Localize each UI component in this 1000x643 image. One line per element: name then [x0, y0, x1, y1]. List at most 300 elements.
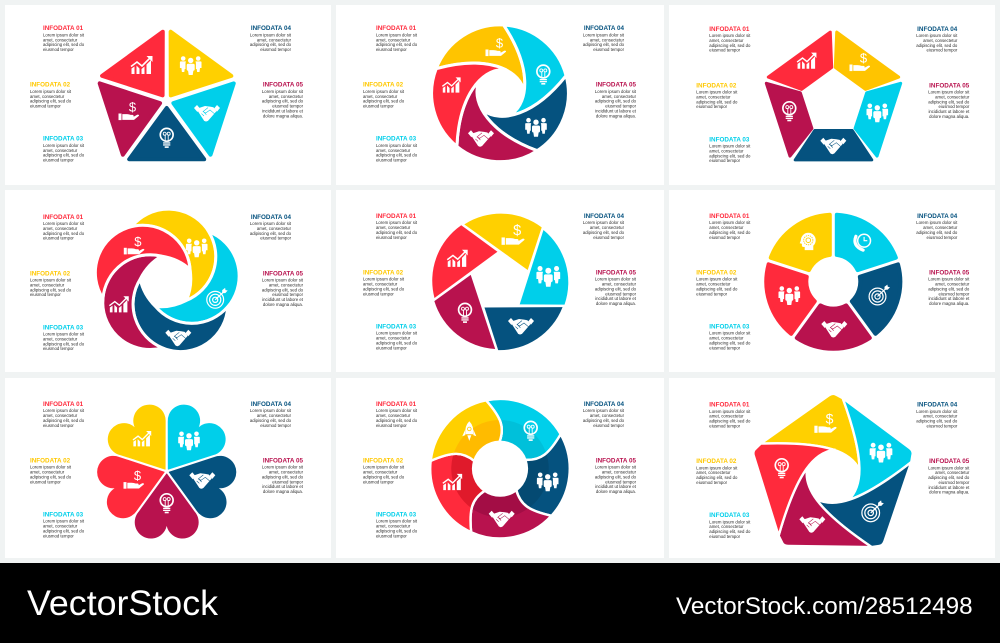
text: infodata 04: amet, consectetur [257, 413, 292, 418]
text: infodata 01: eiusmod tempor [709, 235, 741, 240]
icon: rocket [462, 421, 476, 441]
segment: cyan sector [818, 206, 902, 284]
icon: handshake [468, 130, 494, 147]
text: infodata 04: Lorem ipsum dolor sit [583, 408, 625, 413]
segment: red swirl [415, 49, 504, 153]
text: infodata 02: amet, consectetur [30, 283, 65, 288]
text: infodata 02: adipiscing elit, sed do [30, 474, 72, 479]
text: infodata 04: INFODATA 04 [917, 401, 958, 408]
text: infodata 04: Lorem ipsum dolor sit [916, 409, 958, 414]
text: infodata 04: amet, consectetur [257, 37, 292, 42]
panel: aperture circle [336, 190, 664, 372]
icon: clock and phone [855, 234, 870, 250]
text: infodata 01: Lorem ipsum dolor sit [709, 220, 751, 225]
text: infodata 02: adipiscing elit, sed do [696, 475, 738, 480]
text: infodata 05: adipiscing elit, sed do [595, 286, 637, 291]
icon: handshake [508, 318, 534, 334]
text: infodata 03: adipiscing elit, sed do [376, 153, 418, 158]
panel: swirl circle [336, 5, 664, 186]
text: infodata 01: eiusmod tempor [709, 48, 741, 53]
text blocks [363, 401, 637, 538]
text: infodata 03: INFODATA 03 [709, 323, 750, 330]
text: infodata 01: adipiscing elit, sed do [709, 43, 751, 48]
icon: chart [442, 77, 461, 93]
text: infodata 05: amet, consectetur [269, 283, 304, 288]
text: infodata 01: adipiscing elit, sed do [43, 231, 85, 236]
segment: crimson swirl [440, 82, 549, 186]
segment: cyan band [486, 399, 561, 460]
segment: crimson triangle [100, 67, 172, 155]
text: infodata 05: INFODATA 05 [929, 82, 970, 89]
text: infodata 04: amet, consectetur [257, 226, 292, 231]
text: infodata 05: eiusmod tempor [938, 104, 970, 109]
panel card [669, 378, 995, 558]
diagram: swirl donut [431, 400, 569, 538]
text: infodata 02: INFODATA 02 [696, 458, 737, 465]
segment: cyan blade [818, 383, 921, 500]
text: infodata 05: incididunt ut labore et [928, 296, 970, 301]
panel card [5, 190, 331, 372]
text blocks [30, 214, 304, 351]
segment: yellow triangle [140, 32, 231, 117]
icon: hand with dollar [118, 100, 139, 120]
text: infodata 05: incididunt ut labore et [928, 485, 970, 490]
text: infodata 03: Lorem ipsum dolor sit [709, 331, 751, 336]
segment: yellow trapezoid [819, 32, 899, 101]
text: infodata 05: Lorem ipsum dolor sit [262, 465, 304, 470]
diagram: crescent swirl [84, 209, 251, 370]
text: infodata 05: dolore magna aliqua. [263, 489, 303, 494]
text: infodata 04: INFODATA 04 [251, 214, 291, 221]
text: infodata 04: adipiscing elit, sed do [250, 42, 292, 47]
text: infodata 01: eiusmod tempor [43, 236, 74, 241]
text: infodata 03: Lorem ipsum dolor sit [376, 519, 418, 524]
text: infodata 04: Lorem ipsum dolor sit [250, 408, 292, 413]
diagram: pentagon ring [766, 32, 901, 160]
text: infodata 01: INFODATA 01 [376, 401, 417, 408]
text: infodata 03: adipiscing elit, sed do [709, 153, 751, 158]
text: infodata 03: INFODATA 03 [43, 136, 84, 143]
text: infodata 01: adipiscing elit, sed do [376, 230, 418, 235]
text: infodata 03: amet, consectetur [43, 336, 78, 342]
segment: crimson band [472, 490, 551, 538]
diagram: donut sectors [758, 206, 908, 349]
text: infodata 05: INFODATA 05 [263, 82, 303, 89]
text: infodata 05: INFODATA 05 [929, 269, 970, 276]
icon: handshake [189, 472, 215, 489]
text: infodata 04: Lorem ipsum dolor sit [916, 33, 958, 38]
text: infodata 05: eiusmod tempor [605, 104, 637, 109]
segment: navy blade [473, 270, 569, 361]
icon: target [862, 500, 884, 522]
text: infodata 04: eiusmod tempor [593, 423, 625, 428]
text: infodata 02: INFODATA 02 [696, 269, 737, 276]
text: infodata 05: incididunt ut labore et [262, 108, 304, 114]
text: infodata 02: INFODATA 02 [363, 82, 404, 89]
panel: crescent swirl [5, 190, 331, 372]
text: infodata 02: amet, consectetur [696, 282, 731, 287]
text: infodata 04: Lorem ipsum dolor sit [916, 220, 958, 225]
icon: bulb [537, 65, 550, 85]
text: infodata 04: eiusmod tempor [926, 235, 958, 240]
text: infodata 03: Lorem ipsum dolor sit [43, 332, 85, 337]
text: infodata 03: eiusmod tempor [709, 534, 741, 539]
text: infodata 02: INFODATA 02 [363, 457, 404, 464]
text: infodata 04: eiusmod tempor [260, 47, 292, 52]
text blocks [696, 402, 970, 539]
text: infodata 04: Lorem ipsum dolor sit [250, 32, 292, 38]
segment: navy triangle [129, 108, 204, 159]
text: infodata 02: Lorem ipsum dolor sit [363, 277, 405, 282]
text: infodata 05: adipiscing elit, sed do [595, 474, 637, 479]
text: infodata 05: incididunt ut labore et [262, 484, 304, 489]
segment: cyan swirl [484, 11, 573, 116]
text blocks [363, 213, 637, 350]
text: infodata 05: Lorem ipsum dolor sit [595, 277, 637, 282]
text: infodata 05: amet, consectetur [602, 94, 637, 99]
text: infodata 04: INFODATA 04 [584, 25, 624, 32]
icon: handshake [165, 330, 191, 346]
icon: target [207, 288, 228, 308]
panel card [336, 5, 664, 185]
segment: yellow sector [764, 206, 849, 284]
icon: bulb [783, 102, 796, 121]
text: infodata 02: amet, consectetur [30, 94, 65, 99]
text: infodata 02: amet, consectetur [696, 95, 731, 100]
diagram: hearts flower [93, 399, 240, 538]
text: infodata 02: amet, consectetur [363, 94, 398, 99]
text: infodata 05: eiusmod tempor [272, 479, 304, 484]
text: infodata 05: adipiscing elit, sed do [928, 99, 970, 104]
icon: handshake [489, 511, 515, 527]
text: infodata 04: INFODATA 04 [584, 401, 624, 408]
text: infodata 04: Lorem ipsum dolor sit [250, 221, 292, 226]
icon: bulb [160, 128, 173, 148]
text: infodata 05: incididunt ut labore et [595, 296, 637, 301]
text: infodata 04: eiusmod tempor [260, 236, 292, 241]
text: infodata 05: adipiscing elit, sed do [262, 474, 304, 479]
text: infodata 05: adipiscing elit, sed do [595, 99, 637, 104]
text: infodata 04: Lorem ipsum dolor sit [583, 32, 625, 38]
icon: bulb [775, 459, 788, 478]
text: infodata 03: INFODATA 03 [709, 512, 750, 519]
icon: people [536, 266, 560, 287]
icon: hand with dollar [850, 50, 870, 71]
icon: chart [133, 431, 151, 446]
text: infodata 02: amet, consectetur [696, 470, 731, 475]
text: infodata 02: eiusmod tempor [363, 291, 394, 296]
text: infodata 02: INFODATA 02 [363, 269, 404, 276]
text: infodata 02: Lorem ipsum dolor sit [363, 465, 405, 470]
icon: head with gear [800, 233, 816, 250]
text: infodata 03: amet, consectetur [376, 148, 411, 153]
panel: hearts flower [5, 378, 331, 558]
text: infodata 03: eiusmod tempor [43, 158, 74, 163]
text: infodata 03: amet, consectetur [43, 148, 78, 153]
text: infodata 04: eiusmod tempor [593, 47, 625, 52]
icon: hand with dollar [124, 234, 144, 254]
text: infodata 03: eiusmod tempor [709, 158, 741, 163]
text: infodata 04: adipiscing elit, sed do [583, 42, 625, 47]
text: infodata 03: Lorem ipsum dolor sit [43, 519, 85, 524]
panel card [336, 190, 664, 372]
text: infodata 04: amet, consectetur [923, 225, 958, 230]
icon: bulb [524, 421, 537, 441]
text: infodata 05: eiusmod tempor [272, 292, 304, 297]
text: infodata 05: INFODATA 05 [929, 458, 970, 465]
text: infodata 03: eiusmod tempor [43, 533, 74, 538]
text: infodata 01: amet, consectetur [709, 414, 744, 419]
text: infodata 05: INFODATA 05 [263, 270, 303, 277]
segment: yellow crescent [132, 209, 216, 300]
segment: cyan heart [143, 399, 232, 488]
text: infodata 04: amet, consectetur [923, 414, 958, 419]
text: infodata 02: eiusmod tempor [696, 291, 728, 296]
segment: navy sector [845, 254, 908, 337]
text: infodata 04: adipiscing elit, sed do [916, 230, 958, 235]
text: infodata 03: Lorem ipsum dolor sit [376, 143, 418, 148]
segment: cyan blade [500, 227, 578, 318]
text: infodata 03: amet, consectetur [43, 524, 78, 529]
text: infodata 02: adipiscing elit, sed do [696, 99, 738, 104]
text: infodata 04: amet, consectetur [590, 413, 625, 418]
text: infodata 04: adipiscing elit, sed do [250, 418, 292, 423]
text: infodata 05: amet, consectetur [602, 282, 637, 287]
text: infodata 05: amet, consectetur [602, 470, 637, 475]
text: infodata 05: Lorem ipsum dolor sit [262, 89, 304, 94]
icon: people [870, 443, 892, 462]
segment: navy trapezoid [795, 130, 872, 160]
icon: chart [109, 296, 129, 312]
text: infodata 05: incididunt ut labore et [262, 297, 304, 302]
text: infodata 04: INFODATA 04 [917, 213, 958, 220]
text: infodata 03: eiusmod tempor [709, 345, 741, 350]
segment: cyan crescent [139, 226, 251, 335]
text: infodata 03: adipiscing elit, sed do [43, 153, 85, 158]
text: infodata 04: eiusmod tempor [926, 423, 958, 428]
text: infodata 01: INFODATA 01 [709, 26, 750, 33]
segment: navy crescent [116, 247, 238, 370]
text: infodata 01: Lorem ipsum dolor sit [43, 32, 85, 38]
segment: crimson crescent [84, 239, 206, 362]
text: infodata 01: adipiscing elit, sed do [43, 42, 85, 47]
text: infodata 02: eiusmod tempor [696, 104, 728, 109]
icon: hand with dollar [124, 468, 144, 489]
text: infodata 03: Lorem ipsum dolor sit [709, 144, 751, 149]
text: infodata 04: INFODATA 04 [251, 25, 291, 32]
text: infodata 05: eiusmod tempor [605, 479, 637, 484]
segment: crimson sector [797, 305, 870, 349]
text: infodata 02: amet, consectetur [30, 470, 65, 475]
diagram: swirl circle [415, 11, 592, 186]
panel: swirl pentagon [669, 378, 995, 587]
text: infodata 02: adipiscing elit, sed do [696, 286, 738, 291]
text: infodata 03: adipiscing elit, sed do [376, 340, 418, 345]
text: infodata 03: amet, consectetur [376, 524, 411, 529]
icon: handshake [194, 105, 220, 122]
text: infodata 02: adipiscing elit, sed do [30, 99, 72, 104]
text: infodata 01: INFODATA 01 [43, 214, 84, 221]
icon: chart [797, 53, 816, 69]
text: infodata 01: eiusmod tempor [43, 423, 74, 428]
text: infodata 03: INFODATA 03 [376, 511, 417, 518]
text: infodata 04: adipiscing elit, sed do [583, 418, 625, 423]
segment: red blade [731, 426, 834, 544]
text: infodata 04: amet, consectetur [590, 225, 625, 230]
segment: red trapezoid [768, 32, 848, 101]
text: infodata 05: INFODATA 05 [596, 82, 636, 89]
text: infodata 01: Lorem ipsum dolor sit [376, 408, 418, 413]
segment: navy band [518, 434, 569, 514]
text: infodata 01: INFODATA 01 [376, 25, 417, 32]
text: infodata 03: eiusmod tempor [376, 345, 407, 350]
text: infodata 01: amet, consectetur [43, 37, 78, 42]
text: infodata 03: amet, consectetur [376, 336, 411, 341]
text: infodata 01: eiusmod tempor [709, 423, 741, 428]
icon: people [866, 104, 888, 122]
text: infodata 05: incididunt ut labore et [595, 484, 637, 489]
text: infodata 03: amet, consectetur [709, 148, 744, 153]
text: infodata 05: eiusmod tempor [938, 480, 970, 485]
icon: people [186, 238, 208, 257]
icon: bulb [459, 303, 471, 323]
footer image id: VectorStock.com/28512498 [676, 593, 973, 620]
text: infodata 01: amet, consectetur [376, 37, 411, 42]
icon: people [525, 118, 547, 137]
text: infodata 01: Lorem ipsum dolor sit [43, 221, 85, 226]
text: infodata 05: adipiscing elit, sed do [262, 99, 304, 104]
text: infodata 02: Lorem ipsum dolor sit [30, 89, 72, 94]
icon: people [537, 472, 558, 491]
text: infodata 05: dolore magna aliqua. [596, 489, 636, 494]
text: infodata 01: Lorem ipsum dolor sit [709, 409, 751, 414]
panel: donut sectors [669, 190, 995, 372]
text: infodata 02: INFODATA 02 [696, 82, 737, 89]
text: infodata 04: Lorem ipsum dolor sit [583, 220, 625, 225]
text: infodata 01: adipiscing elit, sed do [709, 230, 751, 235]
segment: navy swirl [482, 59, 592, 163]
icon: chart [131, 56, 152, 74]
segment: yellow heart [102, 399, 191, 488]
text: infodata 05: eiusmod tempor [938, 291, 970, 296]
text: infodata 01: Lorem ipsum dolor sit [709, 33, 751, 38]
segment: red band [431, 455, 485, 532]
text blocks [696, 213, 970, 350]
text: infodata 05: dolore magna aliqua. [929, 490, 969, 495]
text: infodata 05: Lorem ipsum dolor sit [595, 89, 637, 94]
text: infodata 01: INFODATA 01 [376, 213, 417, 220]
text: infodata 02: Lorem ipsum dolor sit [696, 465, 738, 470]
icon: handshake [820, 138, 846, 154]
text: infodata 01: amet, consectetur [376, 225, 411, 230]
text: infodata 03: INFODATA 03 [43, 324, 84, 331]
text: infodata 04: adipiscing elit, sed do [250, 231, 292, 236]
icon: chart [447, 250, 468, 267]
text: infodata 05: adipiscing elit, sed do [262, 287, 304, 292]
text: infodata 03: amet, consectetur [709, 524, 744, 529]
text: infodata 05: dolore magna aliqua. [596, 113, 636, 118]
text: infodata 05: eiusmod tempor [272, 104, 304, 109]
text: infodata 03: amet, consectetur [709, 336, 744, 341]
icon: handshake [821, 321, 847, 338]
text: infodata 02: eiusmod tempor [30, 479, 61, 484]
text: infodata 03: eiusmod tempor [376, 533, 407, 538]
text: infodata 05: dolore magna aliqua. [263, 113, 303, 118]
diagram: swirl pentagon [731, 383, 941, 587]
text: infodata 05: Lorem ipsum dolor sit [928, 465, 970, 470]
panel card [336, 378, 664, 558]
text: infodata 05: adipiscing elit, sed do [928, 475, 970, 480]
text: infodata 05: incididunt ut labore et [595, 108, 637, 114]
segment: cyan trapezoid [849, 74, 901, 156]
panel card [669, 190, 995, 372]
text: infodata 05: amet, consectetur [935, 282, 970, 287]
panel card [5, 378, 331, 558]
icon: hand with dollar [502, 223, 525, 245]
text: infodata 01: Lorem ipsum dolor sit [376, 220, 418, 225]
text: infodata 03: adipiscing elit, sed do [43, 528, 85, 533]
text: infodata 02: amet, consectetur [363, 470, 398, 475]
text blocks [30, 401, 304, 538]
text: infodata 03: adipiscing elit, sed do [43, 341, 85, 346]
segment: red blade [424, 221, 502, 312]
segment: yellow blade [464, 214, 542, 270]
panel: pentagon ring [669, 5, 995, 185]
footer background [0, 563, 1000, 643]
text: infodata 01: eiusmod tempor [376, 47, 407, 52]
text: infodata 02: INFODATA 02 [30, 82, 71, 89]
text: infodata 04: INFODATA 04 [584, 213, 624, 220]
text: infodata 01: amet, consectetur [43, 413, 78, 418]
panel: triangular pentagon [5, 5, 331, 185]
text: infodata 01: adipiscing elit, sed do [376, 418, 418, 423]
text: infodata 03: INFODATA 03 [43, 511, 84, 518]
text: infodata 04: amet, consectetur [923, 38, 958, 43]
segment: navy heart [159, 442, 240, 522]
segment: yellow blade [761, 394, 860, 470]
text: infodata 02: Lorem ipsum dolor sit [696, 277, 738, 282]
text: infodata 02: eiusmod tempor [363, 104, 394, 109]
segment: crimson blade [426, 267, 522, 358]
text: infodata 03: adipiscing elit, sed do [376, 528, 418, 533]
text: infodata 05: dolore magna aliqua. [929, 114, 969, 119]
text: infodata 03: Lorem ipsum dolor sit [709, 519, 751, 524]
text: infodata 04: eiusmod tempor [260, 423, 292, 428]
text blocks [696, 26, 970, 163]
footer logo text: VectorStock [27, 584, 219, 623]
segment: yellow swirl [436, 25, 525, 89]
text: infodata 03: Lorem ipsum dolor sit [43, 143, 85, 148]
text: infodata 01: adipiscing elit, sed do [376, 42, 418, 47]
icon: target [869, 285, 890, 305]
icon: people [180, 56, 202, 75]
segment: crimson trapezoid [766, 74, 818, 156]
text: infodata 05: adipiscing elit, sed do [928, 286, 970, 291]
text: infodata 02: amet, consectetur [363, 282, 398, 287]
text: infodata 02: eiusmod tempor [30, 104, 61, 109]
text: infodata 05: Lorem ipsum dolor sit [928, 90, 970, 95]
text: infodata 05: INFODATA 05 [263, 457, 303, 464]
text: infodata 05: dolore magna aliqua. [929, 301, 969, 306]
text: infodata 04: INFODATA 04 [251, 401, 291, 408]
panel: swirl donut [336, 378, 664, 561]
text: infodata 02: adipiscing elit, sed do [30, 287, 72, 292]
segment: yellow band [432, 401, 503, 462]
text: infodata 01: INFODATA 01 [709, 401, 750, 408]
text: infodata 04: adipiscing elit, sed do [916, 43, 958, 48]
segment: red sector [758, 254, 822, 337]
text: infodata 01: amet, consectetur [43, 226, 78, 231]
